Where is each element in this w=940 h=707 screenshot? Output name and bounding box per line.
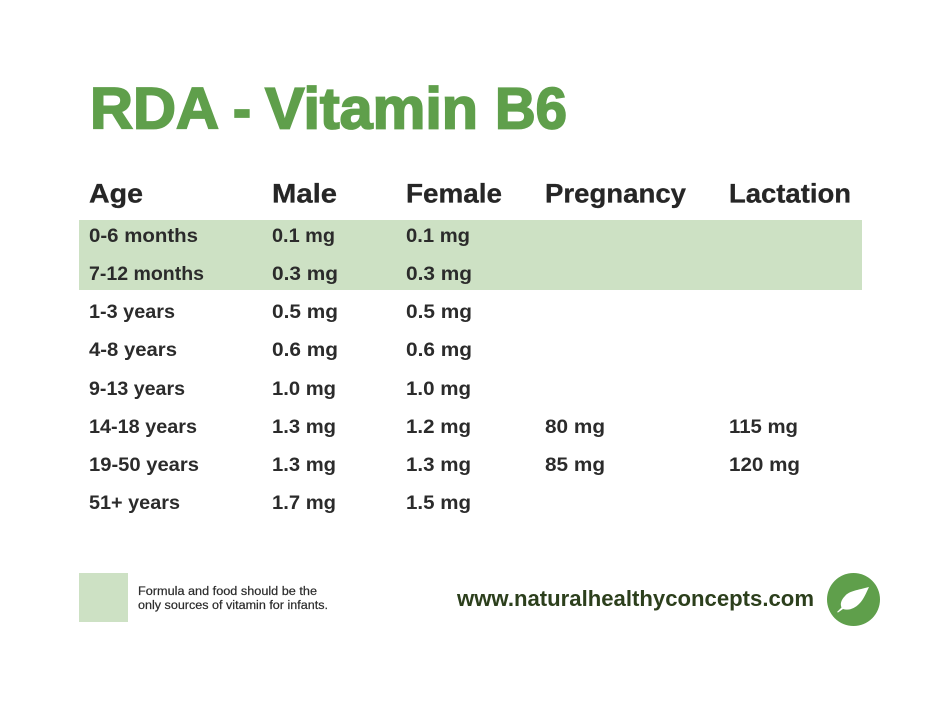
row: 7-12 months: 0.3 mg [272,263,338,285]
row: 9-13 years: 1.0 mg [272,378,336,400]
row: 19-50 years: 120 mg [729,454,800,476]
row: 1-3 years: 1-3 years [89,301,175,323]
title [90,76,567,142]
table header: Age [89,178,143,208]
row: 4-8 years: 0.6 mg [272,339,338,361]
row: 19-50 years: 1.3 mg [272,454,336,476]
row: 0-6 months: 0-6 months [89,225,198,247]
row: 51+ years: 1.5 mg [406,492,471,514]
row: 0-6 months [89,225,470,247]
legend note [138,586,328,612]
row: 1-3 years: 0.5 mg [406,301,472,323]
infant highlight band [79,220,862,290]
row: 14-18 years: 1.2 mg [406,416,471,438]
row: 19-50 years: 1.3 mg [406,454,471,476]
row: 19-50 years: 85 mg [545,454,605,476]
row: 14-18 years: 80 mg [545,416,605,438]
title: B6 [495,76,567,142]
legend swatch [79,573,128,622]
table header: Pregnancy [545,178,686,208]
title: Vitamin [265,76,478,142]
row: 1-3 years [89,301,472,323]
table header: Male [272,178,337,208]
row: 14-18 years: 14-18 years [89,416,197,438]
table [89,178,851,514]
row: 9-13 years: 1.0 mg [406,378,471,400]
row: 19-50 years: 19-50 years [89,454,199,476]
icon: leaf badge [827,573,880,626]
row: 9-13 years: 9-13 years [89,378,185,400]
row: 7-12 months: 0.3 mg [406,263,472,285]
table header: Lactation [729,178,851,208]
row: 51+ years [89,492,471,514]
row: 14-18 years [89,416,798,438]
row: 7-12 months: 7-12 months [89,263,204,285]
table header: Female [406,178,502,208]
title: RDA [90,76,219,142]
row: 9-13 years [89,378,471,400]
row: 0-6 months: 0.1 mg [272,225,335,247]
row: 51+ years: 51+ years [89,492,180,514]
row: 4-8 years: 0.6 mg [406,339,472,361]
row: 19-50 years [89,454,800,476]
title: - [233,76,251,142]
website url: www.naturalhealthyconcepts.com [456,586,814,611]
row: 4-8 years: 4-8 years [89,339,177,361]
row: 4-8 years [89,339,472,361]
legend note: Formula and food should be the [138,586,317,598]
row: 7-12 months [89,263,472,285]
row: 14-18 years: 1.3 mg [272,416,336,438]
row: 1-3 years: 0.5 mg [272,301,338,323]
row: 14-18 years: 115 mg [729,416,798,438]
row: 51+ years: 1.7 mg [272,492,336,514]
table header [89,178,851,208]
row: 0-6 months: 0.1 mg [406,225,470,247]
legend note: only sources of vitamin for infants. [138,600,328,612]
